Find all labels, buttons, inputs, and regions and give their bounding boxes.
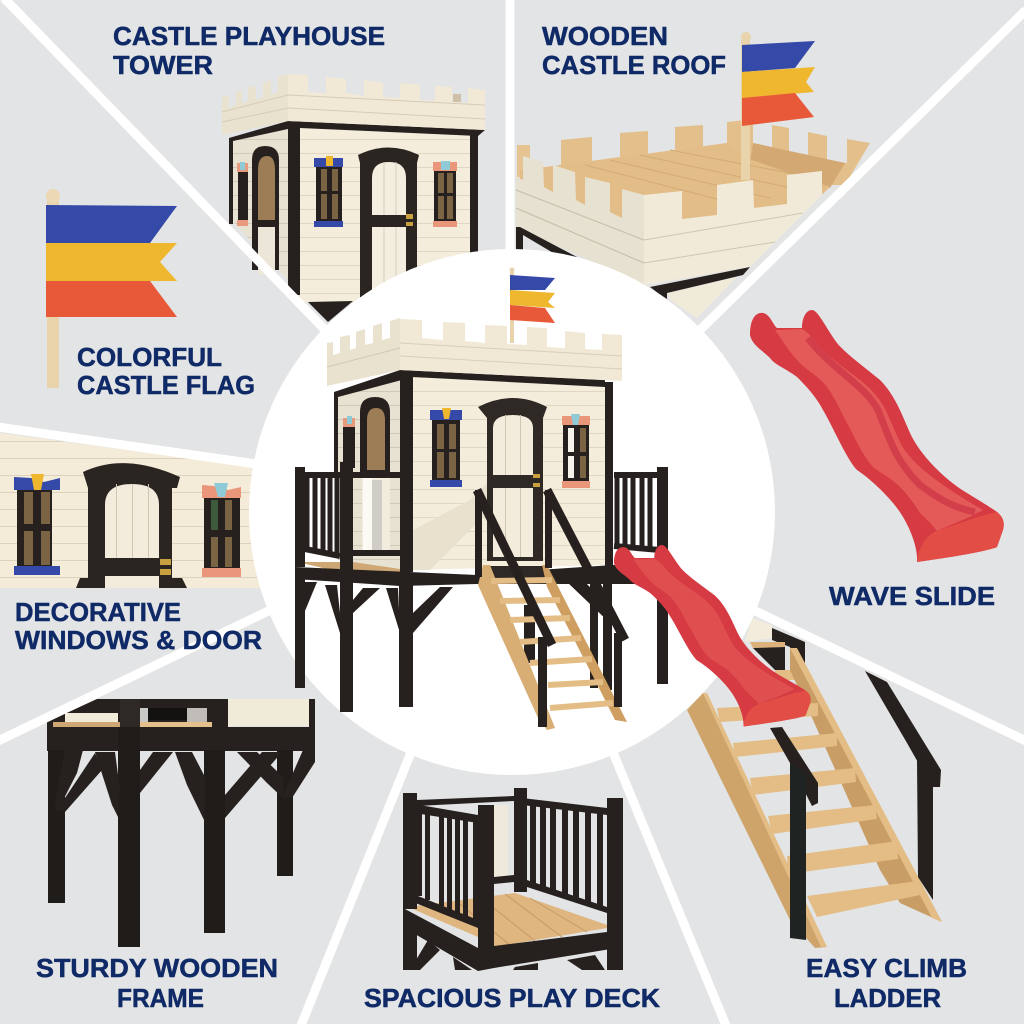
label: decorative windows and door [15, 597, 262, 655]
arched door [76, 463, 187, 588]
right wall [644, 171, 822, 285]
panel: wave slide [750, 310, 1004, 562]
blue window [316, 167, 342, 221]
roof battlements [288, 74, 485, 130]
back left rail [417, 796, 514, 806]
left arched doorway [252, 146, 279, 270]
central white circle [249, 249, 775, 775]
floor [408, 893, 613, 947]
panel: sturdy wooden frame [47, 699, 315, 947]
left side window [343, 425, 355, 468]
back battlements [517, 145, 530, 177]
front wall [300, 128, 470, 310]
label: wooden castle roof: CASTLE ROOF [542, 50, 726, 80]
front left railing [408, 803, 478, 823]
deck beam [295, 567, 477, 586]
legs and braces [295, 467, 668, 712]
blue window [14, 474, 60, 575]
label: easy climb ladder: LADDER [834, 983, 941, 1013]
center red slide [614, 545, 811, 726]
panel: decorative windows and door [0, 433, 262, 588]
left deck and railing [295, 462, 400, 574]
label: decorative windows and door: WINDOWS & DOOR [15, 625, 262, 655]
label: easy climb ladder: EASY CLIMB [806, 953, 967, 983]
label: wave slide: WAVE SLIDE [829, 581, 995, 611]
stairs [478, 565, 627, 730]
left wall [233, 128, 288, 280]
roof battlements [327, 318, 622, 386]
ladder top [772, 628, 805, 667]
flag [510, 268, 555, 343]
panel: colorful castle flag [46, 189, 177, 388]
orange decorative window [562, 414, 590, 488]
left wall [516, 156, 644, 285]
cream wall behind [494, 805, 508, 879]
ladder handrails [770, 727, 818, 806]
left arched doorway [360, 397, 390, 472]
label: castle playhouse tower: CASTLE PLAYHOUSE [113, 21, 385, 51]
blue decorative window [430, 408, 462, 487]
panel: easy climb ladder [687, 618, 942, 948]
panel: wooden castle roof [516, 32, 870, 318]
main castle playhouse illustration [295, 268, 811, 730]
beam [47, 727, 315, 751]
panel: castle playhouse tower [222, 74, 485, 322]
ladder stringers [790, 648, 942, 922]
label: colorful castle flag: CASTLE FLAG [77, 370, 255, 400]
left wall [338, 378, 400, 570]
label: colorful castle flag [77, 342, 255, 400]
panel: spacious play deck [403, 788, 623, 971]
right railing [614, 475, 660, 550]
legs [48, 727, 293, 947]
corner posts [400, 372, 413, 572]
main door [478, 398, 547, 561]
lower wall [668, 277, 737, 318]
braces [55, 750, 315, 822]
label: wooden castle roof [542, 21, 726, 80]
back right railing [522, 798, 607, 815]
deck floor [520, 143, 830, 245]
label: wooden castle roof: WOODEN [542, 21, 668, 51]
front wall [413, 377, 605, 570]
label: castle playhouse tower: TOWER [113, 50, 213, 80]
label: sturdy wooden frame: STURDY WOODEN [36, 953, 278, 983]
label: castle playhouse tower [113, 21, 385, 80]
label: spacious play deck: SPACIOUS PLAY DECK [364, 983, 660, 1013]
deck beam and legs [403, 908, 623, 971]
orange window [202, 483, 241, 577]
orange window [434, 171, 456, 221]
label: sturdy wooden frame: FRAME [117, 983, 204, 1013]
label: sturdy wooden frame [36, 953, 278, 1013]
label: colorful castle flag: COLORFUL [77, 342, 222, 372]
label: easy climb ladder [806, 953, 967, 1013]
ladder steps [717, 703, 920, 917]
door [358, 148, 419, 300]
label: decorative windows and door: DECORATIVE [15, 597, 181, 627]
flag on roof [741, 32, 815, 180]
stair handrails [475, 490, 625, 727]
small left window [238, 172, 248, 221]
